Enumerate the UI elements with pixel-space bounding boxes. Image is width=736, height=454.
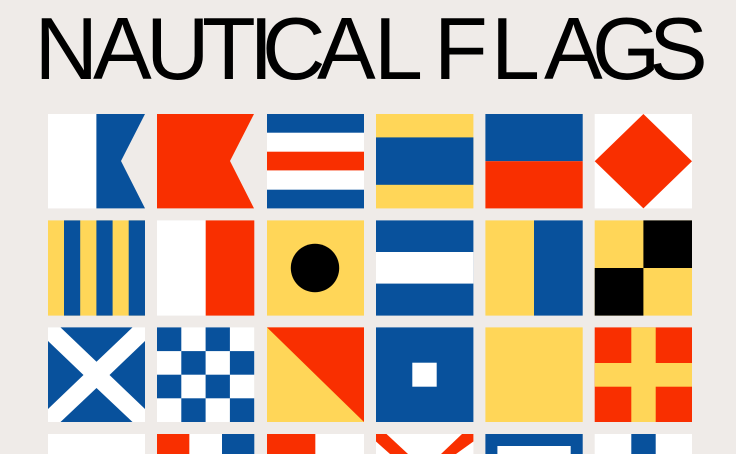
flag Q bbox=[485, 327, 583, 422]
flag R bbox=[595, 327, 692, 422]
flag T bbox=[157, 434, 254, 454]
flag I bbox=[267, 220, 364, 316]
flag E bbox=[485, 114, 583, 208]
title: NAUTICAL FLAGS bbox=[34, 0, 708, 98]
flag G bbox=[48, 220, 145, 316]
flag B bbox=[157, 114, 254, 208]
flag C bbox=[267, 114, 364, 208]
flag J bbox=[376, 220, 473, 316]
flag A bbox=[48, 114, 145, 208]
flag N bbox=[157, 327, 254, 422]
flag P bbox=[376, 327, 473, 422]
flag D bbox=[376, 114, 473, 208]
flag S bbox=[48, 434, 145, 454]
flag W bbox=[485, 434, 583, 454]
flag K bbox=[485, 220, 583, 316]
flag M bbox=[48, 327, 145, 422]
flag H bbox=[157, 220, 254, 316]
flag U bbox=[267, 434, 364, 454]
flag V bbox=[376, 434, 473, 454]
flag X bbox=[595, 434, 692, 454]
flag O bbox=[267, 327, 364, 422]
flag F bbox=[595, 114, 692, 208]
flag L bbox=[595, 220, 692, 316]
